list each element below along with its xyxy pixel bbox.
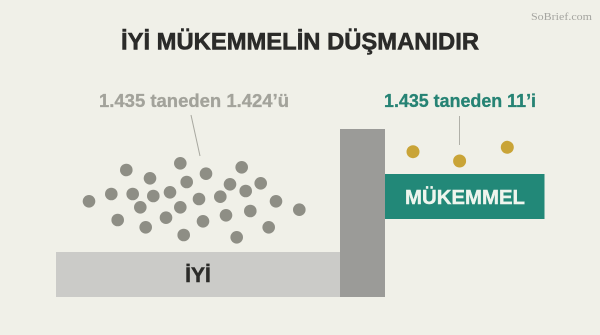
gold dots bbox=[406, 141, 514, 168]
title: İYİ MÜKEMMELİN DÜŞMANIDIR bbox=[121, 28, 479, 56]
label: great share: 1.435 taneden 11’i bbox=[384, 91, 536, 111]
pointer line: good bbox=[191, 115, 200, 156]
label: good share: 1.435 taneden 1.424’ü bbox=[99, 91, 289, 111]
good bar: İYİ bbox=[185, 264, 211, 287]
great bar bbox=[385, 174, 544, 219]
watermark: SoBrief.com bbox=[531, 12, 592, 23]
grey dots cluster bbox=[83, 157, 306, 244]
great bar: MÜKEMMEL bbox=[405, 186, 525, 209]
pointer line: great bbox=[458, 116, 460, 145]
grey wall bbox=[340, 129, 385, 297]
good bar bbox=[56, 252, 340, 297]
